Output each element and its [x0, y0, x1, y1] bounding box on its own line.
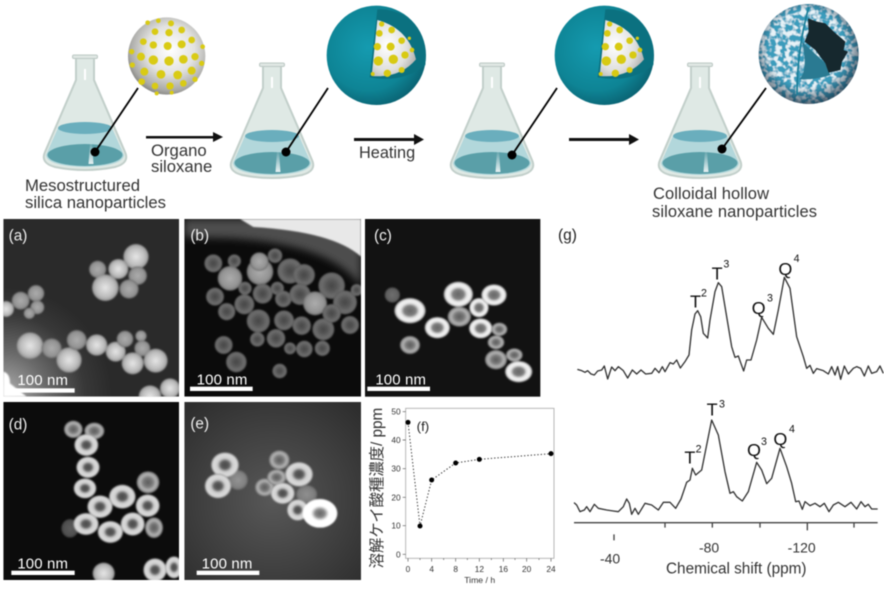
panels d and e [3, 402, 361, 584]
upper peak labels: 3 [767, 292, 773, 304]
label e: (e) [190, 416, 209, 433]
panel: synthesis scheme [25, 4, 859, 221]
x axis ticks and numbers: 16 [499, 564, 508, 574]
upper spectrum [577, 253, 883, 379]
upper peak labels: Q [778, 259, 792, 279]
lower peak labels: 3 [719, 399, 725, 411]
scale bar a [16, 374, 76, 394]
label: mesostructured silica: Mesostructured [25, 176, 140, 195]
arrow 1 [146, 132, 223, 142]
x axis ticks and numbers: 4 [429, 564, 434, 574]
flask 3 [451, 63, 533, 178]
sphere: shell coated particle after heating [555, 6, 654, 105]
arrow 3 [569, 134, 639, 145]
TEM panel a [0, 219, 180, 408]
label: colloidal hollow siloxane: siloxane nanoparticles [652, 203, 817, 221]
upper peak labels: Q [752, 298, 766, 318]
lower peak labels: T [707, 400, 718, 420]
upper peak labels: 2 [701, 288, 707, 300]
y axis ticks and numbers: 50 [391, 407, 401, 417]
y axis ticks and numbers: 40 [391, 435, 401, 445]
y axis ticks and numbers: 0 [396, 549, 401, 559]
label a: (a) [9, 227, 27, 244]
upper peak labels: T [690, 291, 701, 311]
callout line 4 [718, 88, 766, 154]
x axis title: Chemical shift (ppm) [666, 560, 807, 577]
flask 1 [44, 55, 126, 170]
upper peak labels: 4 [794, 253, 800, 265]
y axis ticks and numbers: 30 [391, 464, 401, 474]
x axis [574, 523, 878, 540]
sphere: hollow siloxane particle [759, 4, 859, 104]
chart f: dissolved silicic acid concentration vs time [369, 407, 556, 585]
lower peak labels: 4 [789, 423, 795, 435]
TEM panel d [3, 402, 183, 584]
scale bar e: 100 nm [202, 556, 252, 573]
y axis ticks and numbers [391, 407, 406, 559]
scale bar a: 100 nm [17, 372, 68, 389]
label g: (g) [558, 227, 577, 244]
flask 4 [659, 63, 741, 178]
lower peak labels: Q [773, 429, 787, 449]
sphere: shell coated particle [327, 6, 426, 105]
label: organo siloxane: Organo [151, 141, 207, 160]
x axis ticks and numbers: 8 [453, 564, 458, 574]
axis numbers [600, 540, 816, 566]
y axis title: 溶解ケイ酸種濃度/ ppm [369, 408, 386, 568]
TEM panel b [184, 219, 363, 397]
label f: (f) [417, 419, 429, 434]
scale bar c [367, 371, 430, 391]
label: organo siloxane: siloxane [151, 157, 212, 176]
panels a and b [0, 219, 363, 408]
label: colloidal hollow siloxane: Colloidal hollow [653, 185, 769, 203]
axis numbers: -120 [788, 540, 816, 556]
x axis title: Time / h [464, 575, 495, 585]
x axis ticks and numbers: 0 [406, 564, 411, 574]
x axis ticks and numbers: 12 [475, 564, 484, 574]
upper peak labels: 3 [723, 258, 729, 270]
axis numbers: -40 [600, 550, 620, 566]
scale bar b [190, 371, 253, 391]
label d: (d) [9, 416, 27, 433]
lower peak labels: Q [747, 440, 761, 460]
label b: (b) [190, 227, 209, 244]
x axis ticks and numbers: 24 [546, 564, 556, 574]
scale bar b: 100 nm [197, 371, 247, 388]
label: mesostructured silica: silica nanoparticles [25, 193, 166, 212]
y axis ticks and numbers: 10 [391, 521, 401, 531]
lower peak labels: 2 [696, 443, 702, 455]
arrow 2 [354, 134, 424, 145]
callout line 2 [282, 88, 328, 156]
y axis ticks and numbers: 20 [391, 492, 401, 502]
scale bar d: 100 nm [17, 556, 68, 573]
callout line 1 [90, 88, 138, 156]
chart g: NMR spectra [558, 227, 883, 577]
callout line 3 [508, 88, 557, 160]
TEM panel c [365, 219, 540, 397]
lower peak labels: 3 [761, 436, 767, 448]
lower peak labels [684, 399, 795, 467]
lower spectrum and axis [574, 399, 878, 577]
x axis ticks and numbers: 20 [522, 564, 532, 574]
plot frame [406, 408, 554, 558]
TEM panel e [184, 402, 361, 580]
scale bar c: 100 nm [375, 371, 426, 388]
flask 2 [231, 63, 313, 178]
axis numbers: -80 [699, 540, 719, 556]
label c: (c) [374, 227, 392, 244]
sphere: mesostructured silica particle [128, 17, 205, 95]
x axis ticks and numbers [406, 558, 556, 574]
upper peak labels: T [712, 263, 723, 283]
lower peak labels: T [684, 447, 695, 467]
data series [405, 420, 553, 528]
label: heating: Heating [359, 144, 415, 162]
upper peak labels [690, 253, 800, 318]
